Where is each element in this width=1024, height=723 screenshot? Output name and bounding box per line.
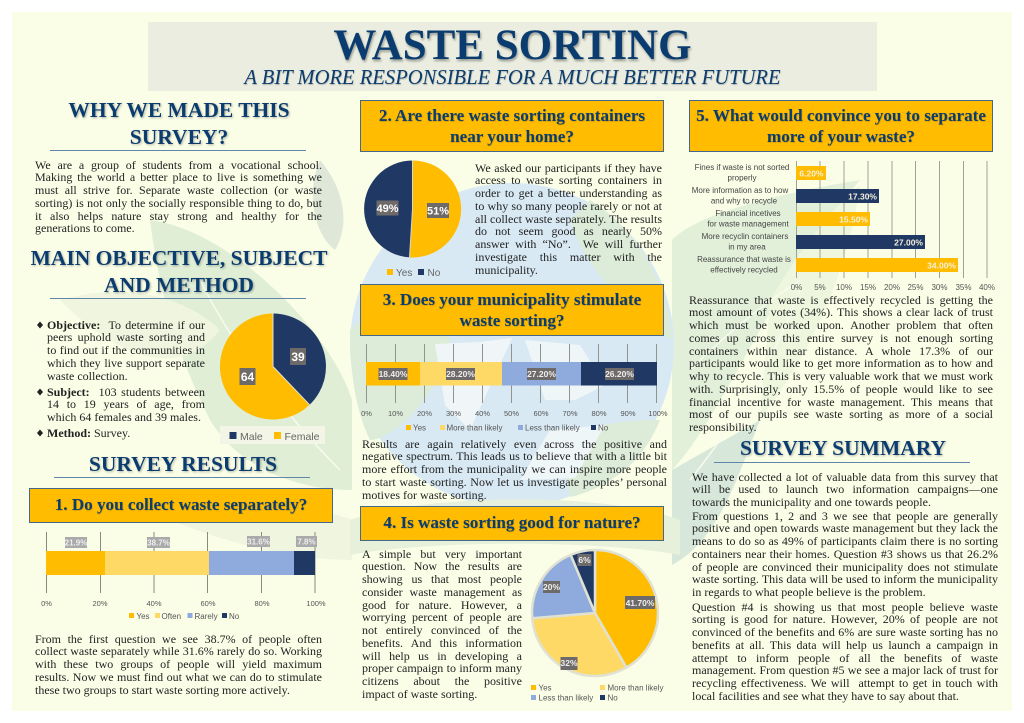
objective xyxy=(47,318,205,382)
stacked bar chart: question 3: 26.20% xyxy=(605,369,634,379)
summary paragraph 1 xyxy=(692,470,998,509)
summary paragraph 2: of people are convinced their municipality does not stimulate xyxy=(692,560,998,574)
stacked bar chart: question 3: More than likely xyxy=(446,424,503,432)
summary paragraph 3: attempt to inform people of all the benefits of waste xyxy=(692,650,998,664)
stacked bar chart: question 1: 0% xyxy=(41,599,52,608)
text: why we made this survey: it also helps nature stay strong and healthy for the xyxy=(35,208,322,222)
text: question 2 xyxy=(475,160,662,276)
stacked bar chart: question 3: 70% xyxy=(562,409,578,418)
text: question 3: negative spectrum. This leads us to believe that with a little bit xyxy=(362,449,667,463)
text: question 2: answer with “No”. We will further xyxy=(475,237,662,251)
text: question 4: consider waste management as xyxy=(362,585,522,599)
stacked bar chart: question 3: Less than likely xyxy=(525,424,580,432)
text: question 4: worrying percent of people are xyxy=(362,610,522,624)
text: why we made this survey xyxy=(35,158,322,235)
text: question 1: From the first question we see 38.7% of people often xyxy=(35,632,322,646)
text: question 3: more effort from the municipality we can inspire more people xyxy=(362,462,667,476)
text: question 4: A simple but very important xyxy=(362,546,522,560)
horizontal bar chart: question 5 xyxy=(692,161,995,292)
horizontal bar chart: question 5: 6.20% xyxy=(799,168,824,178)
horizontal bar chart: question 5: 40% xyxy=(979,283,995,292)
pie chart: question 2: Yes xyxy=(396,268,412,279)
summary paragraph 3: sorting is good for nature. However, 20% of people are not xyxy=(692,612,998,626)
stacked bar chart: question 3: 0% xyxy=(361,409,372,418)
objective: which they live support separate xyxy=(47,356,205,370)
summary paragraph 3: Question #4 is showing us that most people believe waste xyxy=(692,600,998,614)
pie chart: question 4: Less than likely xyxy=(538,694,593,702)
pie chart: question 2: No xyxy=(428,268,441,279)
horizontal bar chart: question 5: 0% xyxy=(791,283,802,292)
pie chart: gender: Female xyxy=(284,431,320,443)
text: question 4: showing us that most people xyxy=(362,572,522,586)
text: question 5: most amount of votes (34%). This shows a clear lack of trust xyxy=(689,305,993,319)
summary paragraph 3: recycling effectiveness. We will attempt to get in touch with xyxy=(692,676,998,690)
text: question 5: most of our pupils see waste sorting as more of a social xyxy=(689,407,993,421)
text: question 4 xyxy=(362,546,522,701)
text: why we made this survey: We are a group of students from a vocational school. xyxy=(35,158,322,172)
summary paragraph 2: waste sorting. This data will be used to inform the municipality xyxy=(692,572,998,586)
objective: waste collection. xyxy=(47,368,128,382)
horizontal bar chart: question 5: 20% xyxy=(884,283,900,292)
subtitle: A BIT MORE RESPONSIBLE FOR A MUCH BETTER FUTURE xyxy=(244,67,781,89)
stacked bar chart: question 1: No xyxy=(229,612,240,621)
text: question 5: responsibility. xyxy=(689,420,757,434)
question 2 box xyxy=(360,100,664,152)
horizontal bar chart: question 5: 17.30% xyxy=(848,192,877,202)
text: question 2: order to get a better understanding as xyxy=(475,186,662,200)
summary paragraph 3 xyxy=(692,600,998,703)
question 3 box xyxy=(360,284,664,336)
text: question 4: not entirely convinced of the xyxy=(362,623,522,637)
text: question 4: question. Now the results are xyxy=(362,559,522,573)
stacked bar chart: question 1: 31.6% xyxy=(247,538,270,546)
stacked bar chart: question 1: 60% xyxy=(200,599,216,608)
stacked bar chart: question 3: 28.20% xyxy=(446,369,475,379)
horizontal bar chart: question 5: 27.00% xyxy=(894,238,923,248)
horizontal bar chart: question 5: 25% xyxy=(907,283,924,292)
question 5 box: 5. What would convince you to separate xyxy=(696,106,986,125)
text: question 3 xyxy=(362,436,667,502)
pie chart: gender: 64 xyxy=(241,370,254,384)
pie chart: gender: Male xyxy=(240,431,263,443)
stacked bar chart: question 1: 21.9% xyxy=(65,538,87,548)
stacked bar chart: question 3: 20% xyxy=(417,409,432,418)
stacked bar chart: question 1 xyxy=(41,532,326,621)
text: question 2: municipality. xyxy=(475,262,538,276)
text: question 4: proper campaign to inform many xyxy=(362,661,522,675)
heading: main objective: MAIN OBJECTIVE, SUBJECT xyxy=(31,246,327,270)
text: question 2: We asked our participants if they have xyxy=(475,160,662,174)
text: question 4: will help us in developing a xyxy=(362,648,522,662)
title banner xyxy=(148,22,877,91)
horizontal bar chart: question 5: More information as to how xyxy=(692,186,788,195)
stacked bar chart: question 3: 27.20% xyxy=(527,369,556,379)
summary paragraph 2: in regards to what people believe is the problem. xyxy=(692,585,926,599)
subject: 14 to 19 years of age, from xyxy=(47,397,205,411)
subject: which 64 females and 39 males. xyxy=(47,410,201,424)
summary paragraph 1: will be used to launch two information campaigns—one xyxy=(692,482,998,496)
pie chart: question 4: Yes xyxy=(538,684,552,692)
pie chart: question 4 xyxy=(530,548,664,702)
stacked bar chart: question 1: 40% xyxy=(146,599,162,608)
question 4 box xyxy=(360,506,664,541)
stacked bar chart: question 1: 100% xyxy=(306,599,326,608)
pie chart: question 4: More than likely xyxy=(608,684,664,692)
summary paragraph 2 xyxy=(692,508,998,599)
summary paragraph 3: management. From question #5 we see a major lack of trust for xyxy=(692,663,998,677)
text: question 1: with these two groups of people will yield maximum xyxy=(35,657,322,671)
stacked bar chart: question 3: 10% xyxy=(388,409,403,418)
text: question 4: good for nature. However, a xyxy=(362,598,522,612)
horizontal bar chart: question 5: 15.50% xyxy=(839,214,868,224)
stacked bar chart: question 1: Rarely xyxy=(194,612,218,621)
text: question 5: Reassurance that waste is effectively recycled is getting the xyxy=(689,292,993,306)
horizontal bar chart: question 5: 34.00% xyxy=(927,260,956,270)
question 3 box: 3. Does your municipality stimulate xyxy=(383,290,641,309)
pie chart: question 4: 20% xyxy=(543,582,560,592)
summary paragraph 2: From questions 1, 2 and 3 we see that people are generally xyxy=(692,508,998,522)
subject: Subject: 103 students between xyxy=(47,384,205,398)
text: question 5: containers within near distance. A whole 17.3% of our xyxy=(689,344,993,358)
text: why we made this survey: generations to come. xyxy=(35,221,135,235)
question 2 box: near your home? xyxy=(450,126,574,146)
text: question 5 xyxy=(689,292,993,434)
question 4 box: 4. Is waste sorting good for nature? xyxy=(383,513,641,532)
horizontal bar chart: question 5: Financial incetives xyxy=(715,209,781,218)
text: question 1 xyxy=(35,632,322,696)
question 1 box xyxy=(29,488,333,523)
horizontal bar chart: question 5: 10% xyxy=(836,283,852,292)
stacked bar chart: question 3: 30% xyxy=(446,409,461,418)
text: question 3: motives for waste sorting. xyxy=(362,488,487,502)
text: survey summary xyxy=(692,470,998,703)
stacked bar chart: question 3: 90% xyxy=(620,409,636,418)
text: question 4: citizens about the positive xyxy=(362,674,522,688)
text: question 2: access to waste sorting containers in xyxy=(475,173,662,187)
text: why we made this survey: Making the world a better place to live is something we xyxy=(35,170,322,184)
stacked bar chart: question 3: Yes xyxy=(413,424,426,432)
question 2 box: 2. Are there waste sorting containers xyxy=(379,106,645,125)
text: question 3: to start waste sorting. Now let us investigate peoples’ personal xyxy=(362,475,667,489)
summary paragraph 2: means to do so as 49% of participants claim there is no sorting xyxy=(692,534,998,548)
text: question 2: investigate this matter with the xyxy=(475,250,662,264)
summary paragraph 1: We have collected a lot of valuable data from this survey that xyxy=(692,470,998,484)
stacked bar chart: question 3 xyxy=(361,344,668,432)
horizontal bar chart: question 5: Fines if waste is not sorted xyxy=(695,163,789,172)
text: question 5: comes up across this entire survey is not enough sorting xyxy=(689,331,993,345)
pie chart: question 2 xyxy=(364,160,462,279)
heading: why we made this survey xyxy=(68,98,291,149)
text: question 3: Results are again relatively even across the positive and xyxy=(362,436,667,450)
pie chart: question 2: 49% xyxy=(376,203,399,215)
horizontal bar chart: question 5: 35% xyxy=(955,283,972,292)
heading: why we made this survey: WHY WE MADE THIS xyxy=(68,98,290,122)
stacked bar chart: question 1: 20% xyxy=(92,599,108,608)
pie chart: question 4: 32% xyxy=(560,658,578,668)
objective: peers uphold waste sorting and xyxy=(47,330,205,344)
text: why we made this survey: must all strive for. Separate waste collection (or waste xyxy=(35,183,322,197)
text: question 1: collect waste separately while 31.6% rarely do so. Working xyxy=(35,644,322,658)
stacked bar chart: question 1: Yes xyxy=(136,612,150,621)
summary paragraph 3: convinced of the benefits and 6% are sure waste sorting has no xyxy=(692,625,998,639)
pie chart: question 2: 51% xyxy=(427,206,449,218)
stacked bar chart: question 1: 80% xyxy=(254,599,270,608)
horizontal bar chart: question 5: 15% xyxy=(860,283,876,292)
text: question 1: results. Now we must find out what we can do to stimulate xyxy=(35,670,322,684)
method: Method: Survey. xyxy=(47,426,130,440)
heading: why we made this survey: SURVEY? xyxy=(130,125,228,149)
text: objective, subject and method list xyxy=(37,318,205,440)
stacked bar chart: question 1: 38.7% xyxy=(147,538,170,548)
horizontal bar chart: question 5: 5% xyxy=(814,283,826,292)
text: question 5: financial incentive for waste management. This means that xyxy=(689,394,993,408)
pie chart: gender xyxy=(220,314,326,444)
text: question 4: impact of waste sorting. xyxy=(362,687,477,701)
stacked bar chart: question 1: 7.8% xyxy=(297,538,316,546)
heading: survey summary: SURVEY SUMMARY xyxy=(740,436,946,460)
horizontal bar chart: question 5: for waste management xyxy=(707,220,789,228)
summary paragraph 3: benefits at all. This data will help us launch a campaign in xyxy=(692,638,998,652)
question 5 box xyxy=(689,100,993,152)
text: question 2: all collect waste separately. The results xyxy=(475,212,662,226)
stacked bar chart: question 3: 80% xyxy=(591,409,607,418)
horizontal bar chart: question 5: properly xyxy=(728,174,756,182)
stacked bar chart: question 3: 50% xyxy=(504,409,519,418)
text: question 1: these two groups to start waste sorting more actively. xyxy=(35,682,290,696)
stacked bar chart: question 3: No xyxy=(598,424,609,432)
pie chart: gender: 39 xyxy=(291,350,305,364)
text: question 2: to why so many people rarely or not at xyxy=(475,199,662,213)
heading: main objective: AND METHOD xyxy=(104,273,254,297)
horizontal bar chart: question 5: in my area xyxy=(728,242,766,252)
stacked bar chart: question 1: Often xyxy=(162,612,181,621)
summary paragraph 1: towards the municipality and one towards people. xyxy=(692,495,931,509)
stacked bar chart: question 3: 18.40% xyxy=(379,369,408,379)
stacked bar chart: question 3: 60% xyxy=(533,409,549,418)
question 3 box: waste sorting? xyxy=(460,310,564,330)
title: WASTE SORTING xyxy=(333,22,692,69)
subject xyxy=(47,384,205,424)
horizontal bar chart: question 5: and why to recycle xyxy=(711,196,778,206)
pie chart: question 4: 41.70% xyxy=(626,598,655,608)
text: question 5: participants would like to get more information as to how and xyxy=(689,356,993,370)
objective: to find out if the communities in xyxy=(47,343,205,357)
text: question 5: which must be worked upon. Another problem that often xyxy=(689,318,993,332)
text: question 4: benefits. And this information xyxy=(362,636,522,650)
heading: main objective xyxy=(31,246,330,297)
pie chart: question 4: No xyxy=(608,694,618,702)
stacked bar chart: question 3: 40% xyxy=(475,409,490,418)
summary paragraph 2: containers near their homes. Question #3 shows us that 26.2% xyxy=(692,547,998,561)
horizontal bar chart: question 5: effectively recycled xyxy=(710,266,778,274)
horizontal bar chart: question 5: Reassurance that waste is xyxy=(697,255,791,264)
text: question 5: with. Surprisingly, only 15.5% of people would like to see xyxy=(689,382,993,396)
stacked bar chart: question 3: 100% xyxy=(648,409,668,418)
question 1 box: 1. Do you collect waste separately? xyxy=(55,495,307,514)
text: why we made this survey: sorting) is not only the socially responsible thing to do, but xyxy=(35,196,322,210)
heading: survey results: SURVEY RESULTS xyxy=(89,452,277,476)
question 5 box: more of your waste? xyxy=(767,126,915,146)
text: question 5: why to recycle. This is very valuable work that we must work xyxy=(689,369,993,383)
summary paragraph 3: local facilities and see what they have to say about that. xyxy=(692,689,959,703)
summary paragraph 2: positive and open towards waste management but they lack the xyxy=(692,521,998,535)
pie chart: question 4: 6% xyxy=(578,555,591,565)
objective: Objective: To determine if our xyxy=(47,318,205,332)
bullets xyxy=(37,322,43,436)
text: question 2: do not seem good as nearly 50% xyxy=(475,224,662,238)
horizontal bar chart: question 5: 30% xyxy=(931,283,948,292)
horizontal bar chart: question 5: More recyclin containers xyxy=(702,232,788,241)
